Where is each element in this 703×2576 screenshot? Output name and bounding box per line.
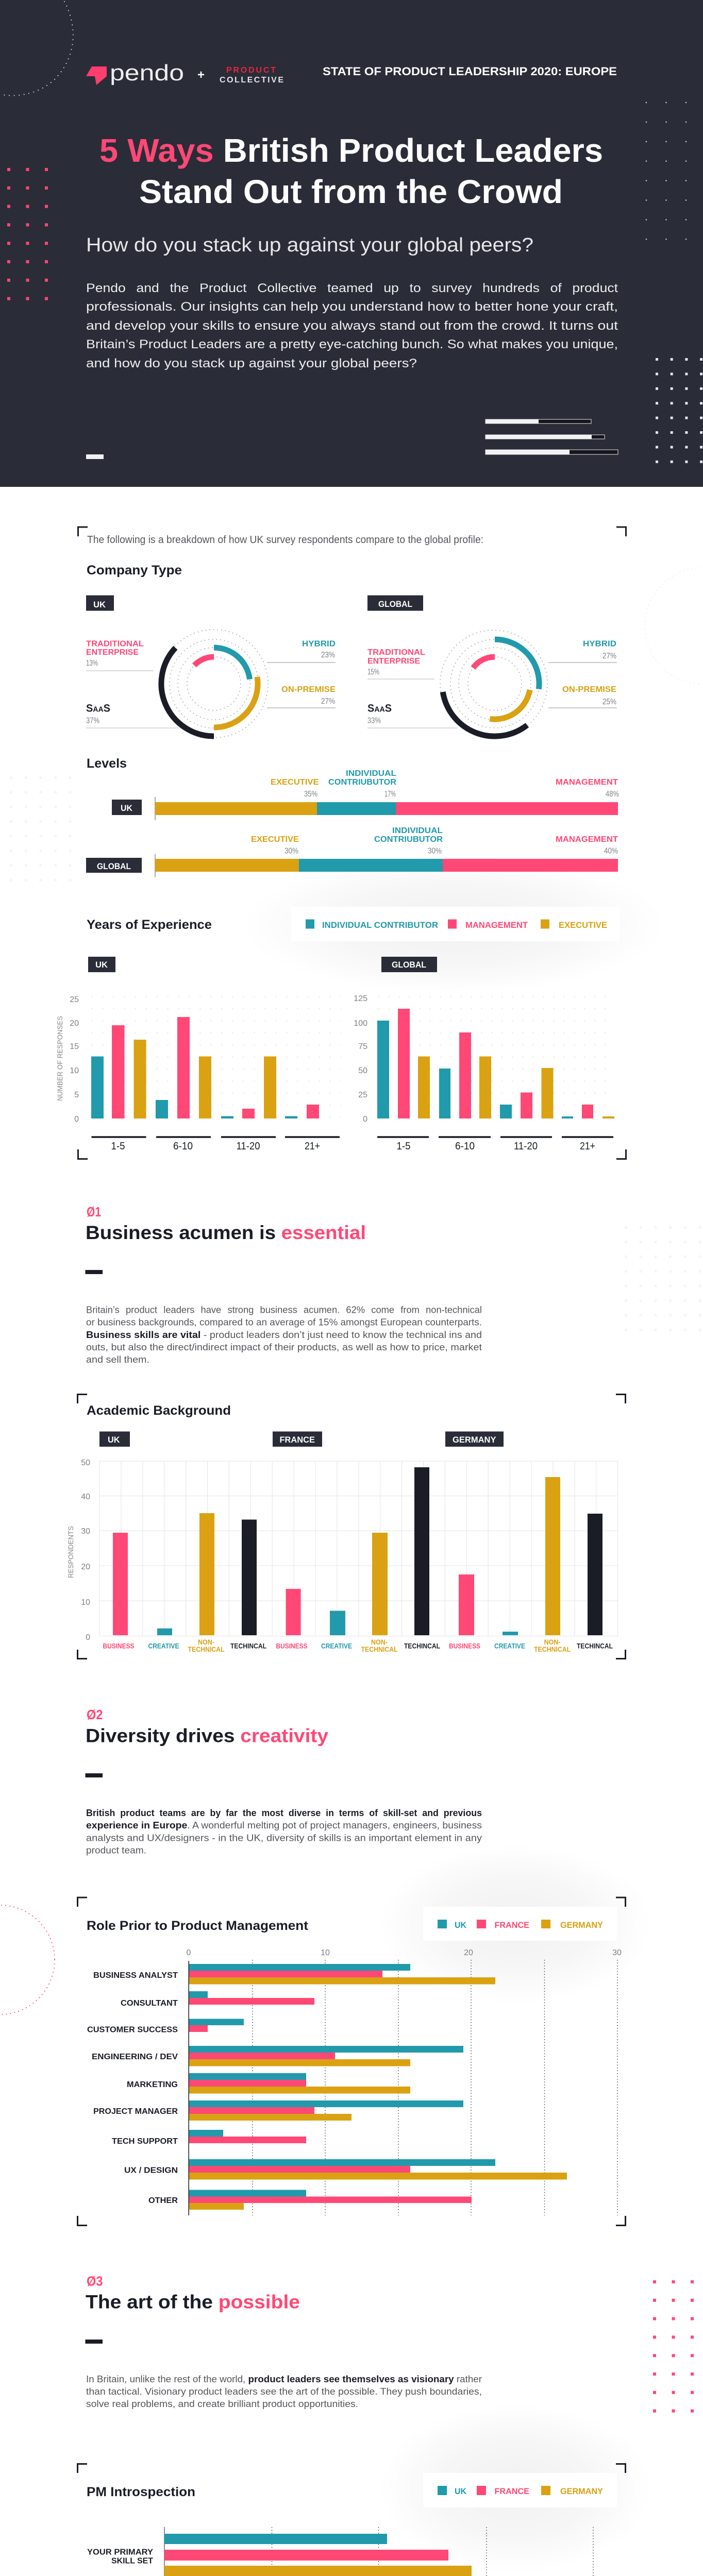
stacked bar: UK levels xyxy=(112,769,619,820)
country tags: FRANCE xyxy=(279,1435,315,1445)
donut chart: UK company type: UK xyxy=(93,600,106,609)
horizontal bar chart: prior roles: 30 xyxy=(612,1948,622,1957)
bar chart: global years of experience: 75 xyxy=(358,1042,367,1051)
title xyxy=(99,132,603,210)
stacked bar: global levels: CONTRIUBUTOR xyxy=(374,835,443,844)
donut chart: UK company type: 37% xyxy=(86,716,99,725)
horizontal bar chart: prior roles: PROJECT MANAGER xyxy=(93,2107,178,2116)
bar chart: academic background by country: CREATIVE xyxy=(148,1641,179,1650)
bar chart: academic background by country: 40 xyxy=(81,1493,90,1501)
donut chart: UK company type: ON-PREMISE xyxy=(281,685,336,694)
legend: countries: UK xyxy=(455,2486,467,2496)
horizontal bar chart: prior roles: BUSINESS ANALYST xyxy=(93,1971,178,1980)
section number: Ø2 xyxy=(87,1707,103,1722)
white dash xyxy=(86,454,104,459)
horizontal bar chart: prior roles: 0 xyxy=(187,1948,191,1957)
body text: Britain’s product leaders have strong business acumen. 62% come from non-technical xyxy=(86,1304,482,1315)
legend: countries xyxy=(423,1907,617,1941)
horizontal bar chart: prior roles: CONSULTANT xyxy=(121,1999,178,2008)
bar chart: academic background by country: CREATIVE xyxy=(494,1641,525,1650)
dash xyxy=(86,2340,103,2344)
body text: and sell them. xyxy=(86,1354,149,1365)
donut chart: UK company type: ENTERPRISE xyxy=(86,648,139,657)
bar chart: academic background by country: TECHINCAL xyxy=(577,1641,613,1650)
bar chart: academic background by country: RESPONDENTS xyxy=(66,1526,75,1578)
legend: countries xyxy=(423,2473,617,2507)
intro paragraph: professionals. Our insights can help you understand how to better hone your craft, xyxy=(86,300,618,314)
bar chart: academic background by country: 20 xyxy=(81,1563,90,1571)
bar chart: academic background by country: BUSINESS xyxy=(103,1641,134,1650)
bar chart: global years of experience: 21+ xyxy=(580,1141,595,1152)
product collective logo xyxy=(220,66,283,84)
bar chart: UK years of experience: 21+ xyxy=(305,1141,320,1152)
bar chart: global years of experience: 125 xyxy=(354,994,367,1003)
bar chart: academic background by country: NON- xyxy=(371,1638,388,1646)
intro paragraph: and how do you stack up against your global peers? xyxy=(86,357,417,370)
horizontal bar chart: prior roles: UX / DESIGN xyxy=(124,2166,178,2175)
body text: than tactical. Visionary product leaders see the art of the possible. They push boundaries, xyxy=(86,2386,482,2397)
legend: respondent level: EXECUTIVE xyxy=(559,920,607,930)
body text: British product teams are by far the most diverse in terms of skill-set and previous xyxy=(86,1808,482,1818)
panel: academic background xyxy=(66,1394,626,1659)
horizontal bar chart: prior roles: OTHER xyxy=(148,2196,178,2205)
bar chart: UK years of experience: 15 xyxy=(70,1042,79,1051)
heading: academic background: Academic Background xyxy=(87,1403,231,1418)
bar chart: global years of experience: 25 xyxy=(358,1091,367,1099)
donut chart: global company type: 25% xyxy=(602,698,616,706)
body text xyxy=(86,1304,482,1365)
body text: Business skills are vital - product leaders don’t just need to know the technical ins and xyxy=(86,1330,482,1340)
horizontal bar chart: primary skill set xyxy=(87,2527,620,2576)
bar chart: UK years of experience: 6-10 xyxy=(173,1141,193,1152)
bar chart: academic background by country: TECHINCAL xyxy=(404,1641,440,1650)
stacked bar: global levels: 30% xyxy=(428,847,442,855)
donut chart: UK company type: HYBRID xyxy=(302,640,336,648)
heading: years of experience: Years of Experience xyxy=(87,918,212,932)
section number: Ø1 xyxy=(87,1204,101,1219)
title: Stand Out from the Crowd xyxy=(139,173,563,210)
donut chart: global company type: ENTERPRISE xyxy=(367,657,420,666)
bar chart: academic background by country: 50 xyxy=(81,1459,90,1467)
stacked bar: UK levels: 17% xyxy=(384,790,396,799)
bar chart: UK years of experience: 11-20 xyxy=(236,1141,260,1152)
donut chart: global company type: SaaS xyxy=(367,703,392,714)
donut chart: UK company type xyxy=(86,596,336,738)
bar chart: academic background by country: TECHINCAL xyxy=(230,1641,266,1650)
dash xyxy=(86,1270,103,1274)
stacked bar: global levels: GLOBAL xyxy=(97,861,131,871)
body text: experience in Europe . A wonderful melting pot of project managers, engineers, business xyxy=(86,1820,482,1831)
donut chart: global company type: 27% xyxy=(602,652,616,660)
horizontal bar chart: prior roles: TECH SUPPORT xyxy=(112,2137,178,2146)
heading: role prior: Role Prior to Product Management xyxy=(87,1919,309,1933)
heading: company type: Company Type xyxy=(87,563,182,578)
donut chart: global company type: TRADITIONAL xyxy=(367,648,425,657)
body text: outs, but also the direct/indirect impact of their products, as well as how to price, market xyxy=(86,1342,482,1352)
stacked bar: UK levels: CONTRIUBUTOR xyxy=(328,778,396,787)
country tags xyxy=(99,1431,504,1447)
bar chart: global years of experience xyxy=(354,957,615,1152)
donut chart: UK company type: 27% xyxy=(321,697,335,706)
section 03: art of the possible xyxy=(86,2273,696,2414)
bar chart: global years of experience: 50 xyxy=(358,1066,367,1075)
panel: role prior to product management xyxy=(0,1897,626,2226)
donut chart: UK company type: 13% xyxy=(86,659,98,668)
body text xyxy=(86,1808,482,1856)
bar chart: global years of experience: 100 xyxy=(354,1019,367,1028)
stacked bar: global levels: 40% xyxy=(604,847,618,855)
decorative progress bars xyxy=(486,419,618,454)
title: 5 Ways British Product Leaders xyxy=(99,132,603,169)
donut chart: UK company type: TRADITIONAL xyxy=(86,640,144,648)
product collective logo: COLLECTIVE xyxy=(220,76,283,84)
bar chart: UK years of experience: 25 xyxy=(70,995,79,1004)
bar chart: academic background by country: BUSINESS xyxy=(449,1641,480,1650)
dash xyxy=(86,1773,103,1777)
bar chart: UK years of experience: 0 xyxy=(74,1115,79,1124)
body text: product team. xyxy=(86,1845,146,1856)
report name: STATE OF PRODUCT LEADERSHIP 2020: EUROPE xyxy=(323,65,617,78)
stacked bar: UK levels: INDIVIDUAL xyxy=(346,769,396,778)
intro sentence: The following is a breakdown of how UK survey respondents compare to the global profile: xyxy=(87,534,483,546)
header panel xyxy=(0,0,703,487)
bar chart: academic background by country: 0 xyxy=(86,1633,90,1642)
bar chart: academic background by country: 10 xyxy=(81,1598,90,1607)
section number: Ø3 xyxy=(87,2273,103,2289)
bar chart: UK years of experience: 20 xyxy=(70,1019,79,1028)
country tags: UK xyxy=(108,1435,120,1445)
horizontal bar chart: prior roles xyxy=(87,1948,622,2215)
donut chart: global company type: HYBRID xyxy=(583,640,616,648)
legend: countries: GERMANY xyxy=(560,2486,604,2496)
intro paragraph: Pendo and the Product Collective teamed up to survey hundreds of product xyxy=(86,281,618,295)
bar chart: academic background by country: NON- xyxy=(544,1638,561,1646)
horizontal bar chart: prior roles: ENGINEERING / DEV xyxy=(92,2053,178,2061)
legend: respondent level: MANAGEMENT xyxy=(465,920,528,930)
stacked bar: global levels: EXECUTIVE xyxy=(251,835,299,844)
legend: countries: FRANCE xyxy=(495,1920,529,1930)
donut chart: global company type: ON-PREMISE xyxy=(562,685,616,694)
stacked bar: UK levels: MANAGEMENT xyxy=(556,778,618,787)
bar chart: academic background by country: TECHNICAL xyxy=(361,1645,398,1653)
pendo logo xyxy=(86,60,184,86)
heading: PM introspection: PM Introspection xyxy=(87,2485,195,2499)
section 02: diversity xyxy=(86,1707,482,1856)
horizontal bar chart: primary skill set: SKILL SET xyxy=(111,2556,153,2566)
bar chart: academic background by country: TECHNICAL xyxy=(534,1645,571,1653)
body text: In Britain, unlike the rest of the world, product leaders see themselves as visionary rather xyxy=(86,2374,482,2384)
section heading: Business acumen is essential xyxy=(86,1222,366,1243)
horizontal bar chart: prior roles: 10 xyxy=(321,1948,330,1957)
stacked bar: UK levels: UK xyxy=(121,803,133,813)
legend: countries: GERMANY xyxy=(560,1920,604,1930)
bar chart: UK years of experience: 10 xyxy=(70,1066,79,1075)
horizontal bar chart: prior roles: CUSTOMER SUCCESS xyxy=(87,2026,178,2034)
body text xyxy=(86,2374,482,2409)
legend: countries: FRANCE xyxy=(495,2486,529,2496)
body text: solve real problems, and create brilliant product opportunities. xyxy=(86,2399,358,2409)
bar chart: academic background by country: TECHNICAL xyxy=(188,1645,225,1653)
donut chart: UK company type: 23% xyxy=(321,651,335,659)
stacked bar: global levels xyxy=(86,826,618,877)
stacked bar: UK levels: 35% xyxy=(304,790,317,799)
section 01: business acumen xyxy=(86,1204,703,1365)
bar chart: UK years of experience: UK xyxy=(95,960,108,970)
subtitle: How do you stack up against your global peers? xyxy=(86,234,533,256)
bar chart: academic background by country xyxy=(66,1459,618,1653)
donut chart: global company type: GLOBAL xyxy=(378,599,412,609)
donut chart: global company type: 15% xyxy=(367,668,379,676)
heading: levels: Levels xyxy=(87,756,127,771)
intro paragraph: and develop your skills to ensure you always stand out from the crowd. It turns out xyxy=(86,319,618,333)
body text: or business backgrounds, compared to an average of 15% amongst European counterparts. xyxy=(86,1317,482,1327)
stacked bar: global levels: MANAGEMENT xyxy=(556,835,618,844)
bar chart: global years of experience: 11-20 xyxy=(514,1141,538,1152)
pendo logo: pendo xyxy=(110,60,184,86)
intro paragraph: Britain’s Product Leaders are a pretty eye-catching bunch. So what makes you unique, xyxy=(86,337,618,351)
stacked bar: UK levels: EXECUTIVE xyxy=(271,778,319,787)
bar chart: academic background by country: BUSINESS xyxy=(276,1641,307,1650)
stacked bar: global levels: 30% xyxy=(284,847,298,855)
horizontal bar chart: prior roles: 20 xyxy=(464,1948,473,1957)
bar chart: academic background by country: 30 xyxy=(81,1527,90,1536)
bar chart: academic background by country: NON- xyxy=(198,1638,214,1646)
horizontal bar chart: primary skill set: YOUR PRIMARY xyxy=(87,2548,153,2556)
bar chart: global years of experience: 6-10 xyxy=(455,1141,475,1152)
stacked bar: global levels: INDIVIDUAL xyxy=(392,826,443,835)
stacked bar: UK levels: 48% xyxy=(606,790,619,799)
panel: UK versus global profile xyxy=(10,527,703,1159)
section heading: Diversity drives creativity xyxy=(86,1725,328,1747)
bar chart: global years of experience: 1-5 xyxy=(397,1141,410,1152)
donut chart: UK company type: SaaS xyxy=(86,703,110,714)
bar chart: UK years of experience: 1-5 xyxy=(111,1141,125,1152)
bar chart: UK years of experience: 5 xyxy=(74,1091,79,1099)
intro paragraph xyxy=(86,281,618,370)
bar chart: academic background by country: CREATIVE xyxy=(321,1641,352,1650)
bar chart: UK years of experience: NUMBER OF RESPONSES xyxy=(56,1016,64,1101)
horizontal bar chart: prior roles: MARKETING xyxy=(127,2080,178,2089)
donut chart: global company type xyxy=(367,596,617,737)
country tags: GERMANY xyxy=(453,1435,496,1445)
legend: respondent level xyxy=(291,907,620,941)
body text: analysts and UX/designers - in the UK, diversity of skills is an important element in any xyxy=(86,1833,482,1843)
panel: PM introspection xyxy=(77,2464,626,2576)
legend: respondent level: INDIVIDUAL CONTRIBUTOR xyxy=(322,920,438,930)
bar chart: global years of experience: GLOBAL xyxy=(392,960,426,970)
legend: countries: UK xyxy=(455,1920,467,1930)
bar chart: global years of experience: 0 xyxy=(363,1115,367,1124)
plus sign: + xyxy=(197,68,205,82)
donut chart: global company type: 33% xyxy=(367,716,381,725)
bar chart: UK years of experience xyxy=(56,957,341,1152)
product collective logo: PRODUCT xyxy=(226,66,276,75)
section heading: The art of the possible xyxy=(86,2292,300,2312)
